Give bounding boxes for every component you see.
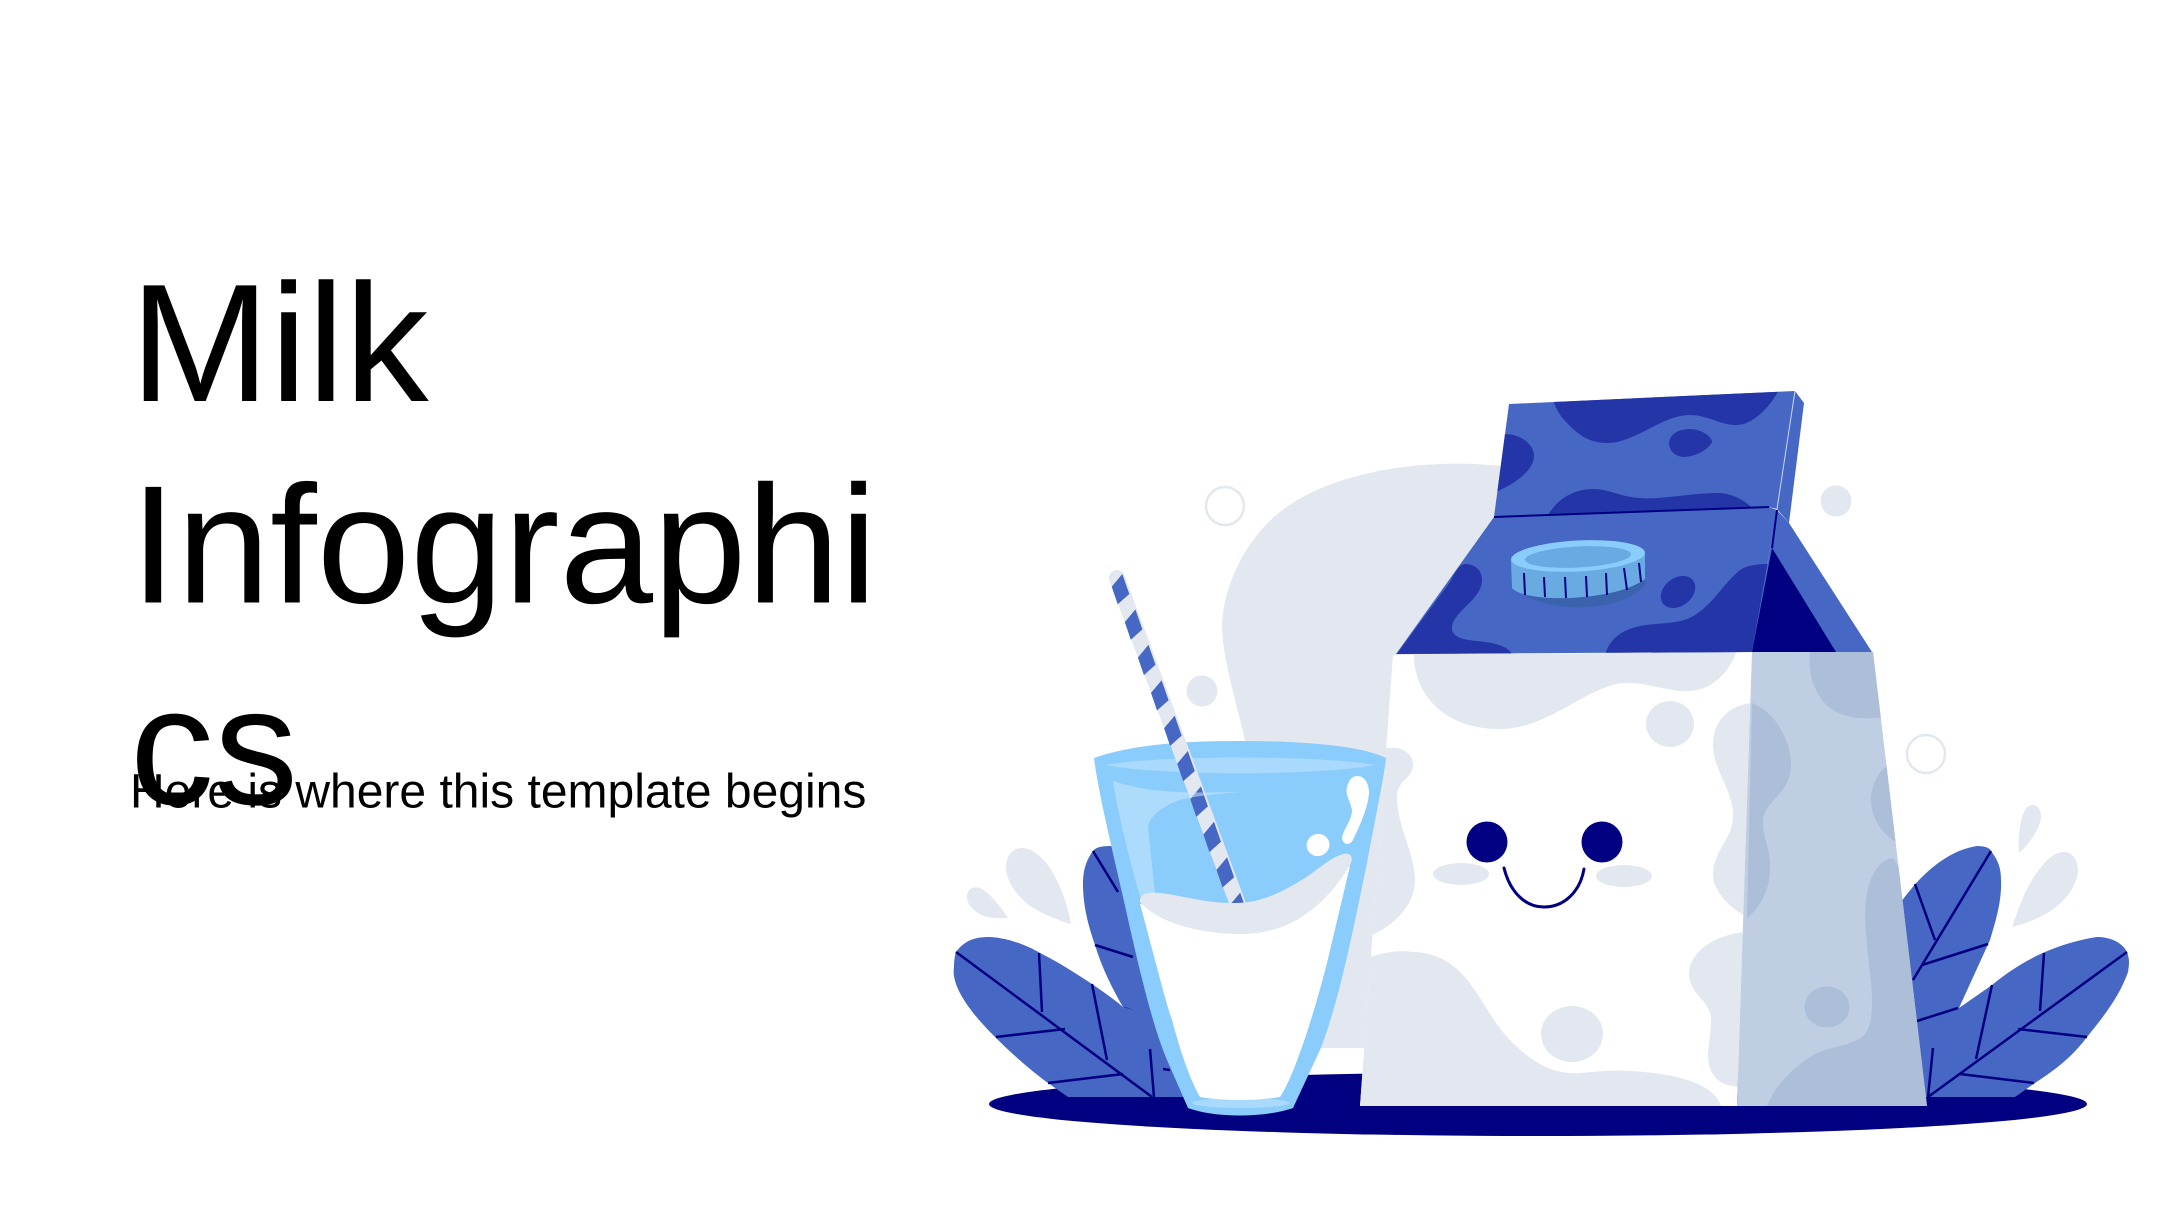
illustration: milk carton and glass [954, 390, 2129, 1136]
decorative dot left [1186, 676, 1218, 706]
flap fold lines [1494, 507, 1777, 548]
face: eyes [1466, 822, 1622, 862]
flap crease highlight [1777, 391, 1795, 509]
carton cap [1510, 537, 1646, 607]
milk body [1140, 866, 1350, 1100]
straw [1112, 574, 1247, 923]
carton upper flap [1494, 390, 1804, 523]
subtitle: Here is where this template begins [130, 766, 866, 818]
glass light wedge [1113, 781, 1240, 897]
carton lower flap [1396, 507, 1777, 655]
leaf back left [1083, 846, 1170, 1030]
rim highlight [1105, 758, 1375, 773]
background blob [1222, 464, 1520, 1048]
decorative outlined circle right [1907, 735, 1945, 773]
glass [1094, 574, 1386, 1116]
leaf front left [954, 937, 1195, 1097]
milk surface [1140, 854, 1352, 934]
decorative dot right [1820, 486, 1852, 516]
face: smile [1504, 868, 1584, 907]
carton right gusset [1752, 510, 1872, 652]
decorative outlined circle left [1206, 487, 1244, 525]
splash drops right [2012, 805, 2078, 927]
title: Infographi [130, 450, 877, 638]
slide canvas [134, 279, 2129, 1136]
carton gusset shadow triangle [1752, 548, 1836, 652]
spot on carton side [1804, 986, 1850, 1028]
carton front face [1340, 650, 1770, 1106]
splash drops left [967, 848, 1071, 924]
ground shadow [989, 1072, 2087, 1136]
carton side face [1737, 650, 1940, 1106]
leaf back right [1880, 846, 2001, 1100]
leaf front right [1925, 937, 2129, 1097]
face: cheeks [1433, 863, 1652, 887]
title: cs [130, 652, 298, 840]
glass base highlight [1192, 1098, 1290, 1108]
milk splash [1303, 776, 1369, 860]
title: Milk [130, 249, 430, 437]
